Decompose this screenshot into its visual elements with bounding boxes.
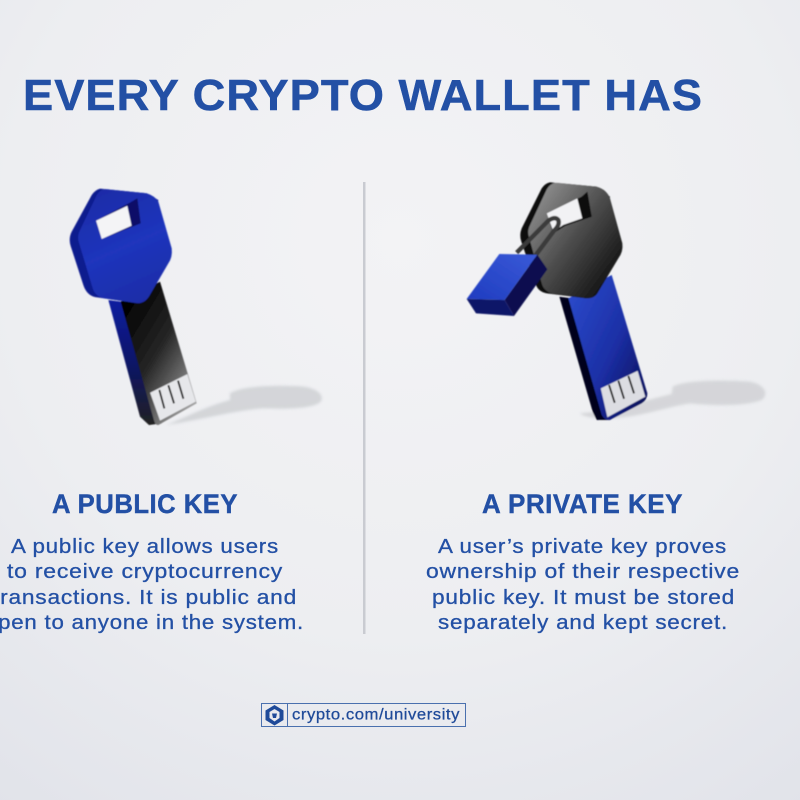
text block: private key description: public key. It must be stored xyxy=(432,586,735,609)
footer url: crypto.com/university xyxy=(292,706,460,724)
contact lines xyxy=(609,376,634,403)
heading: private key: A PRIVATE KEY xyxy=(482,489,683,519)
key shadow xyxy=(580,381,765,418)
icon: public key xyxy=(70,189,322,425)
usb contacts xyxy=(150,374,196,421)
text block: private key description xyxy=(426,535,740,634)
text block: public key description: transactions. It is public and xyxy=(0,586,297,609)
key shaft face xyxy=(568,275,647,420)
padlock shackle xyxy=(517,218,559,256)
usb contacts xyxy=(601,371,645,417)
key head back xyxy=(520,182,610,298)
key hole opening xyxy=(96,206,132,239)
key shaft face xyxy=(121,282,197,425)
text block: public key description: to receive cryptocurrency xyxy=(7,560,283,583)
text block: private key description: A user’s private key proves xyxy=(438,535,727,558)
heading: public key: A PUBLIC KEY xyxy=(52,489,238,519)
text block: private key description: ownership of their respective xyxy=(426,560,740,583)
icon: private key with padlock xyxy=(467,182,765,420)
text block: public key description xyxy=(0,535,304,634)
key head face xyxy=(528,183,622,298)
padlock front xyxy=(467,299,514,316)
text block: public key description: A public key allows users xyxy=(11,535,279,558)
text block: private key description: separately and kept secret. xyxy=(438,611,728,634)
key hole opening xyxy=(547,198,582,232)
key head face xyxy=(78,189,172,303)
contact lines xyxy=(159,381,183,408)
footer badge xyxy=(262,704,466,726)
icon: crypto.com logo xyxy=(266,705,284,726)
key hole xyxy=(96,198,141,239)
key shadow xyxy=(167,386,322,425)
key hole xyxy=(547,192,592,233)
key shaft side xyxy=(108,300,162,425)
title: EVERY CRYPTO WALLET HAS xyxy=(23,71,703,120)
padlock top xyxy=(467,254,537,300)
padlock right side xyxy=(505,255,547,316)
divider line xyxy=(363,182,366,634)
key head back xyxy=(70,189,158,303)
key shaft side xyxy=(559,297,610,420)
